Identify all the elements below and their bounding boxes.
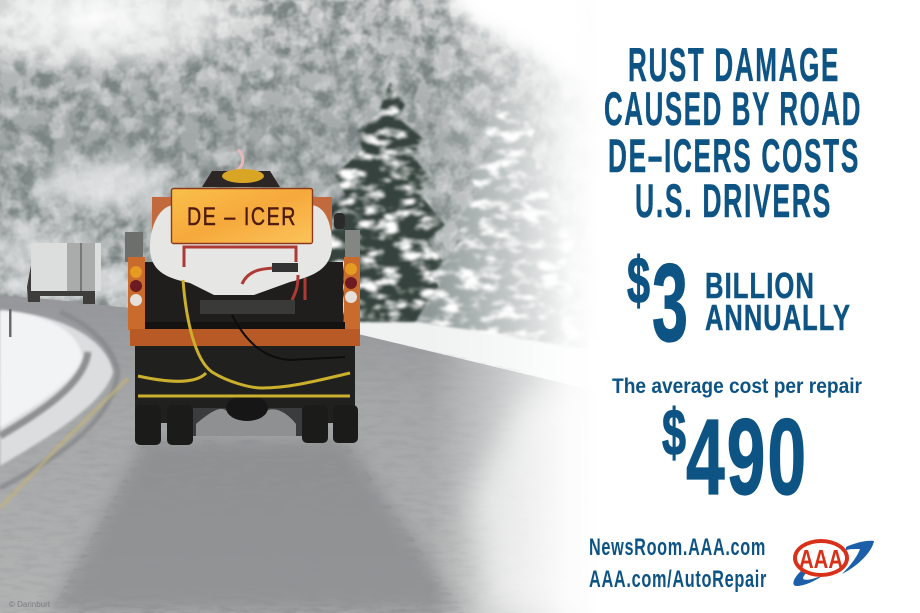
truck: tank pipes — [184, 247, 305, 300]
truck: dark cylinder by mast — [334, 213, 345, 229]
photo: pale snow-covered pine tree on the right — [414, 99, 578, 346]
truck: yellow hoses — [138, 280, 350, 396]
photo: dark wheel rut on curve — [0, 352, 88, 436]
stat unit line 2: ANNUALLY — [705, 297, 851, 338]
stat: 490 per repair — [662, 395, 808, 517]
logo white inner oval — [797, 543, 845, 573]
photo: white sky above the ridge — [425, 0, 590, 90]
panel: solid white text column — [600, 0, 920, 613]
trailer door seam — [80, 243, 82, 291]
truck: middle dark frame — [145, 262, 343, 324]
photo: snowy forested hillside — [0, 0, 600, 340]
photo: outer road rut on curve — [0, 312, 118, 488]
logo upper blue swoosh — [842, 541, 874, 574]
truck: orange warning sign — [172, 188, 312, 244]
photo: de-icer truck — [125, 150, 360, 445]
photo: dark snow-covered pine tree — [328, 81, 446, 324]
photo: distant semi truck — [27, 243, 101, 304]
truck: rear differential — [226, 395, 268, 421]
photo: road surface — [0, 296, 600, 613]
logo letters: AAA — [799, 544, 843, 574]
truck: spreader spray — [196, 409, 296, 436]
newsroom link: NewsRoom.AAA.com — [589, 534, 766, 561]
stat: 3 billion annually — [627, 242, 851, 365]
truck: lower dark body — [135, 345, 355, 423]
truck: console strip — [200, 300, 295, 314]
logo lower blue swoosh — [793, 570, 822, 586]
repair amount: 490 — [686, 396, 808, 517]
sign panel — [172, 188, 312, 244]
truck: light frame — [202, 171, 280, 187]
photo: extra whitening lower right — [470, 380, 600, 613]
photo: white fade into text column — [430, 0, 600, 613]
truck: pink hose — [235, 150, 243, 172]
repair dollar sign: $ — [662, 395, 686, 469]
truck: bumper top shadow — [145, 322, 345, 329]
photo: dark centre of the road behind the truck — [50, 440, 465, 613]
logo red oval — [793, 539, 849, 577]
photo: credit: © Darinburt — [9, 600, 51, 609]
cab and wheels — [27, 265, 95, 304]
photo: road tyre track texture — [56, 540, 464, 613]
photo: road streak texture — [4, 337, 517, 610]
truck: white tank — [150, 205, 332, 295]
repair link: AAA.com/AutoRepair — [589, 566, 767, 593]
icon: AAA logo — [793, 539, 874, 586]
truck: right orange light panel — [344, 257, 360, 330]
truck: left mast — [125, 232, 143, 262]
photo: fog at top left — [0, 0, 280, 78]
stat unit line 1: BILLION — [705, 265, 815, 306]
truck: black hose — [232, 315, 345, 360]
truck: orange bumper — [130, 329, 360, 346]
stat label: The average cost per repair — [612, 375, 862, 398]
truck: upper orange body — [152, 197, 332, 237]
photo: snow patch on the left verge — [0, 310, 82, 428]
truck: tires — [135, 405, 358, 445]
truck: axle shadow — [192, 408, 302, 436]
photo: snow bank on the right of the road — [350, 322, 600, 400]
sign lettering: DE – ICER — [187, 203, 297, 231]
photo: snowy road scene with de-icing truck — [0, 0, 578, 613]
heading — [604, 38, 862, 227]
links — [589, 534, 767, 593]
truck: amber beacon — [222, 169, 264, 183]
truck: left orange light panel — [128, 257, 145, 330]
stat dollar sign: $ — [627, 243, 650, 317]
photo: yellow road line — [0, 378, 128, 508]
truck: control box — [272, 263, 298, 272]
photo: light outer snow band around curve — [0, 312, 113, 466]
photo: roadside pole — [9, 309, 12, 337]
stat number: 3 — [652, 242, 688, 365]
truck: rear lights — [130, 263, 357, 306]
trailer — [31, 243, 101, 291]
truck: right mast — [345, 230, 360, 262]
trailer rear doors — [67, 243, 95, 291]
